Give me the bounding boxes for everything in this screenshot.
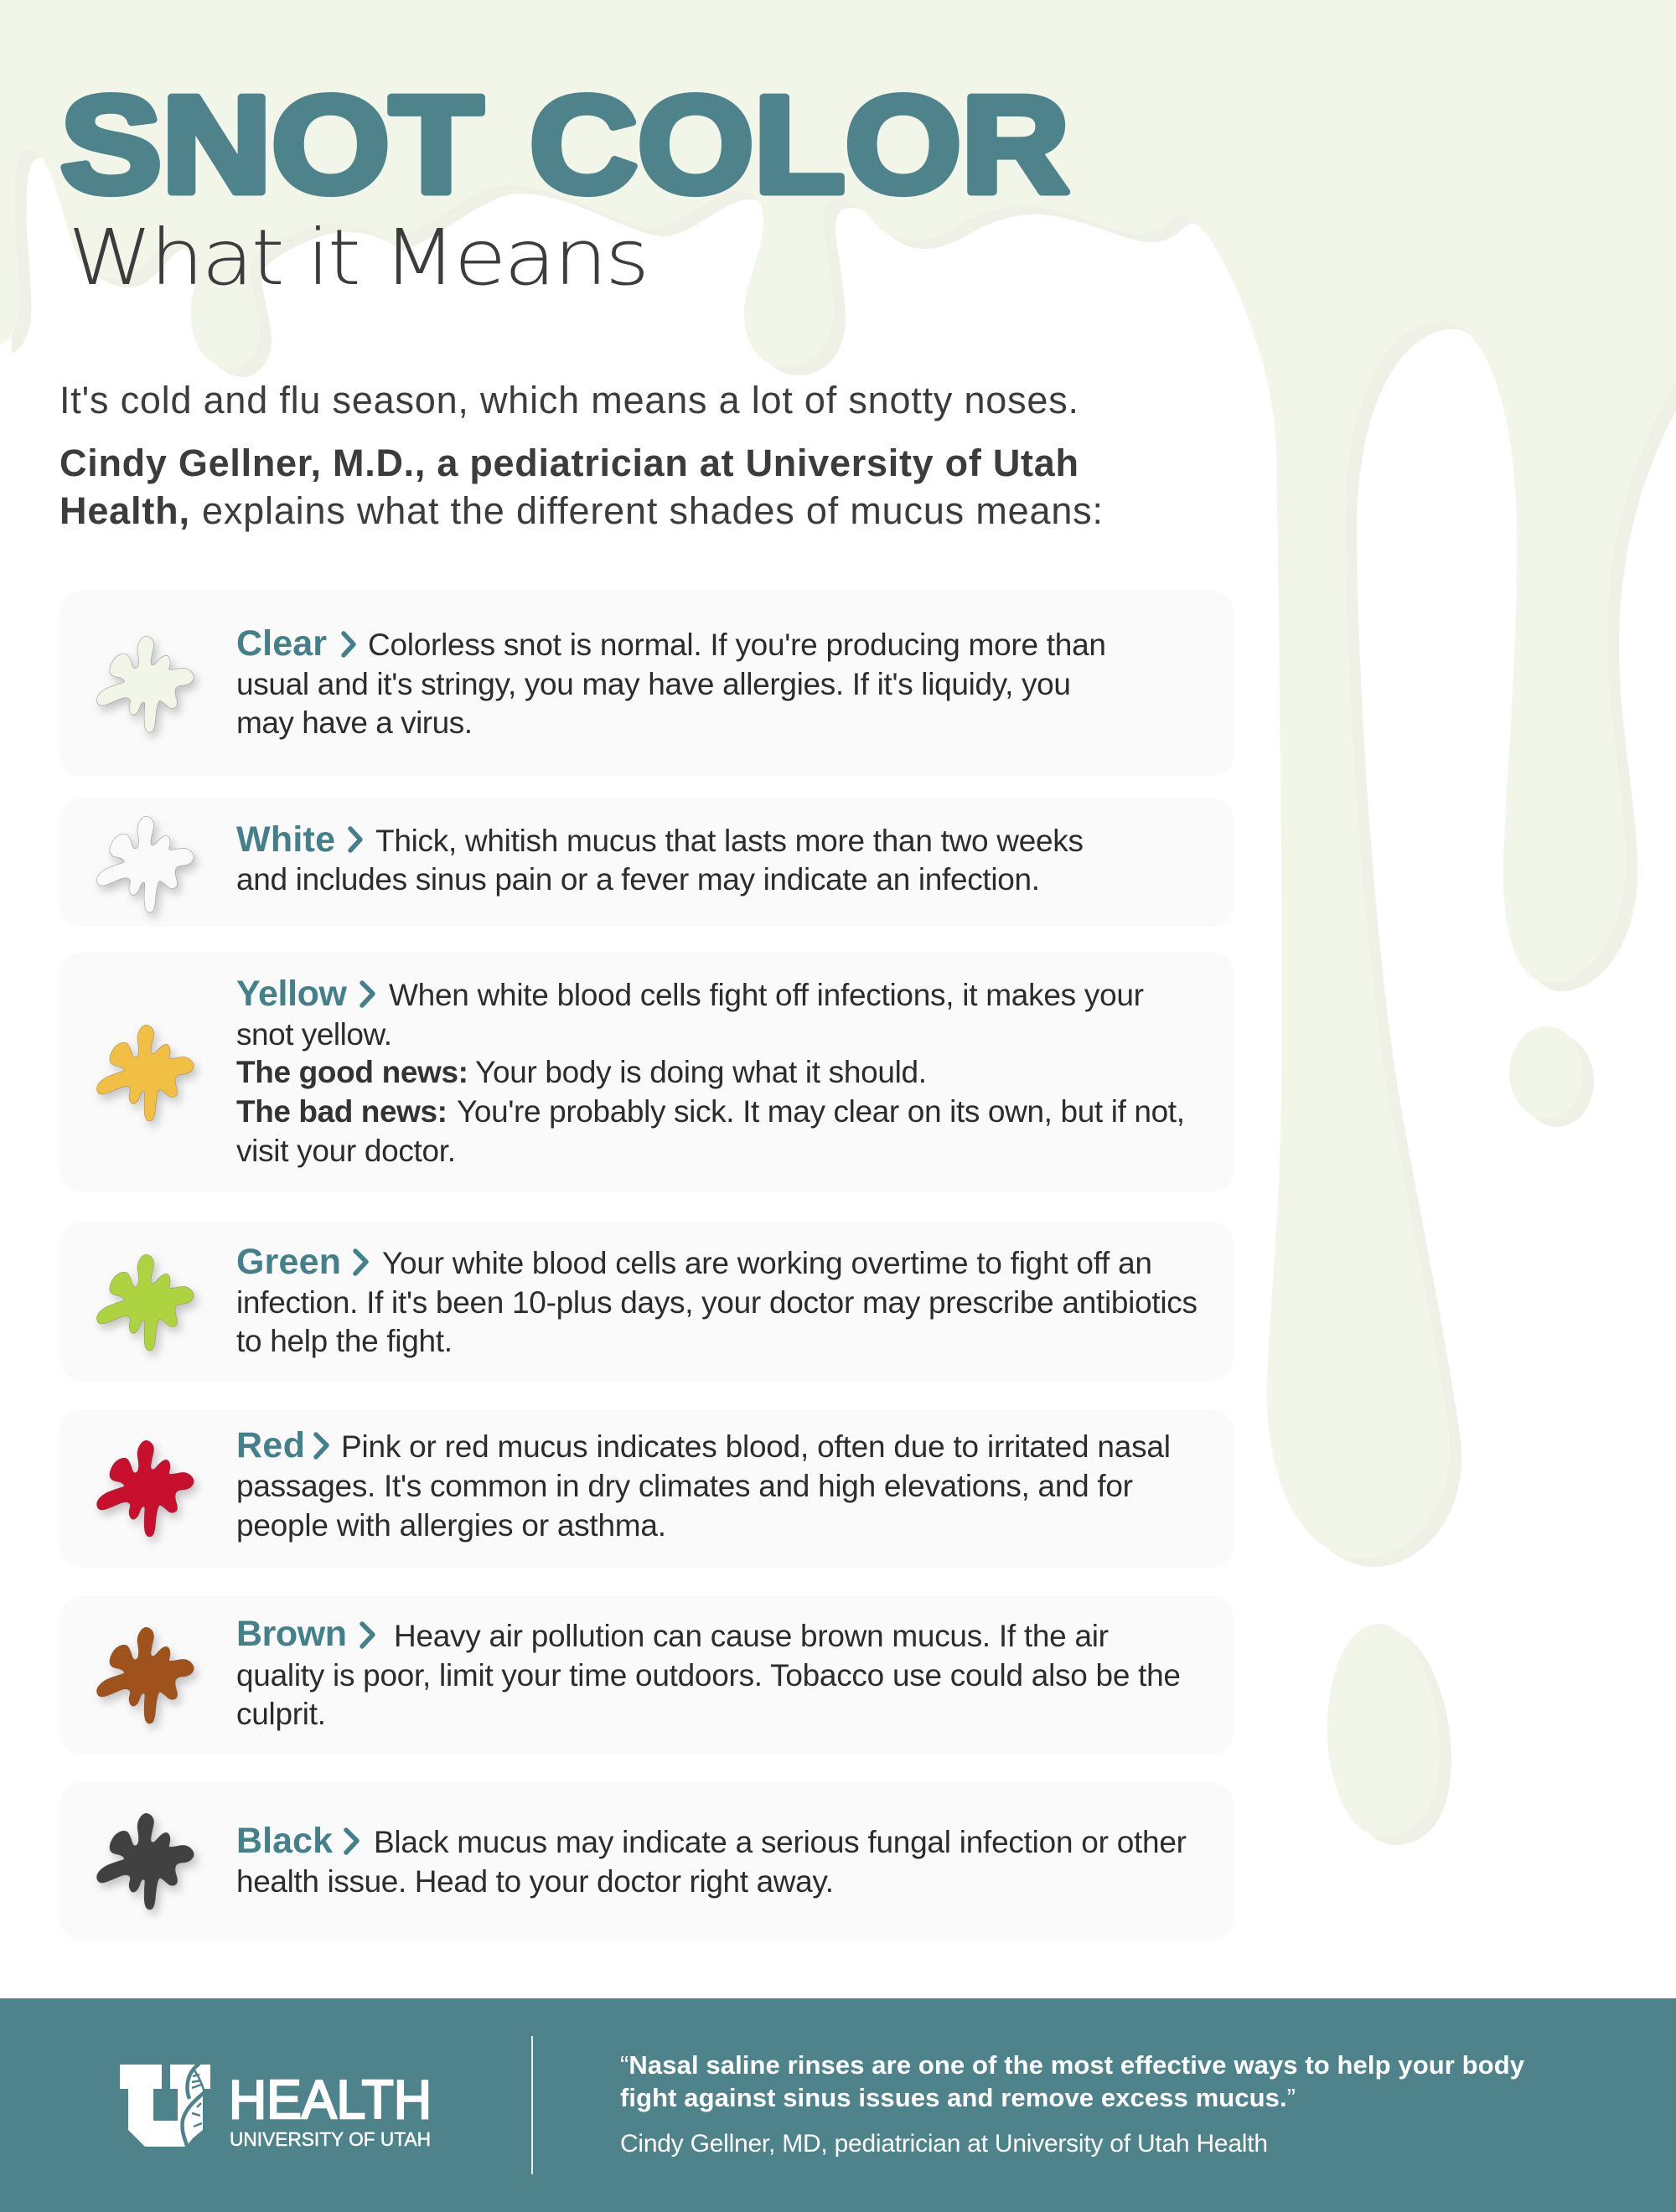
icon: red splat: [98, 1441, 193, 1536]
green text: to help the fight.: [236, 1324, 453, 1358]
footer band: [0, 1998, 1676, 2212]
red text: Pink or red mucus indicates blood, often due to irritated nasal: [341, 1429, 1171, 1464]
brown text: Heavy air pollution can cause brown mucus. If the air: [394, 1619, 1109, 1653]
yellow text: [236, 978, 1185, 1168]
red text: passages. It's common in dry climates and high elevations, and for: [236, 1469, 1133, 1503]
panel: green: [59, 1222, 1234, 1381]
black heading: Black: [236, 1821, 333, 1861]
title: [60, 68, 1069, 221]
yellow text: visit your doctor.: [236, 1134, 456, 1168]
clear text: may have a virus.: [236, 705, 473, 740]
arrow: [362, 1624, 373, 1646]
arrow: [344, 633, 354, 655]
brown text: quality is poor, limit your time outdoors. Tobacco use could also be the: [236, 1658, 1181, 1693]
clear text: usual and it's stringy, you may have allergies. If it's liquidy, you: [236, 667, 1071, 701]
intro text: [59, 379, 1103, 532]
panel: clear: [59, 591, 1234, 777]
green text: Your white blood cells are working overtime to fight off an: [382, 1246, 1152, 1280]
logo subline: UNIVERSITY OF UTAH: [230, 2128, 431, 2150]
arrow: [350, 829, 360, 850]
red heading: Red: [236, 1425, 305, 1465]
clear text: Colorless snot is normal. If you're producing more than: [368, 628, 1106, 662]
black text: Black mucus may indicate a serious fungal infection or other: [374, 1825, 1187, 1859]
yellow text: The bad news:: [236, 1094, 447, 1129]
quote: fight against sinus issues and remove excess mucus.”: [620, 2083, 1296, 2112]
intro text: Health,: [59, 489, 189, 532]
quote: “Nasal saline rinses are one of the most effective ways to help your body: [620, 2050, 1525, 2080]
brown heading: Brown: [236, 1614, 347, 1654]
logo: University of Utah Health: [120, 2064, 432, 2150]
yellow text: snot yellow.: [236, 1017, 392, 1052]
white heading: White: [236, 819, 335, 860]
logo wordmark: HEALTH: [229, 2069, 432, 2130]
icon: clear splat: [98, 637, 193, 731]
yellow heading: Yellow: [236, 974, 348, 1014]
white text: [236, 824, 1084, 897]
black text: health issue. Head to your doctor right away.: [236, 1864, 834, 1899]
quote: [620, 2050, 1525, 2158]
green text: infection. If it's been 10-plus days, your doctor may prescribe antibiotics: [236, 1285, 1198, 1320]
icon: yellow splat: [98, 1026, 193, 1120]
yellow text: Your body is doing what it should.: [475, 1055, 927, 1089]
yellow text: The good news:: [236, 1055, 468, 1089]
red text: [236, 1429, 1171, 1543]
arrow: [316, 1434, 327, 1457]
yellow text: You're probably sick. It may clear on its own, but if not,: [457, 1094, 1185, 1129]
brown text: [236, 1619, 1181, 1731]
arrow: [346, 1830, 357, 1853]
panel: red: [59, 1409, 1234, 1568]
panel: black: [59, 1782, 1234, 1941]
green heading: Green: [236, 1242, 341, 1282]
brown text: culprit.: [236, 1697, 326, 1731]
white text: Thick, whitish mucus that lasts more than two weeks: [375, 824, 1084, 858]
yellow text: When white blood cells fight off infections, it makes your: [389, 978, 1144, 1012]
title: SNOT: [60, 68, 483, 221]
quote attribution: Cindy Gellner, MD, pediatrician at University of Utah Health: [620, 2130, 1268, 2158]
clear text: [236, 628, 1106, 740]
icon: white splat: [98, 817, 193, 912]
arrow: [355, 1251, 366, 1274]
red text: people with allergies or asthma.: [236, 1508, 666, 1543]
white text: and includes sinus pain or a fever may indicate an infection.: [236, 862, 1040, 897]
intro text: Cindy Gellner, M.D., a pediatrician at University of Utah: [59, 442, 1079, 484]
panel: brown: [59, 1596, 1234, 1755]
arrow: [362, 983, 373, 1005]
icon: brown splat: [98, 1628, 193, 1723]
black text: [236, 1825, 1187, 1899]
icon: green splat: [98, 1255, 193, 1350]
intro text: It's cold and flu season, which means a lot of snotty noses.: [59, 379, 1079, 421]
subtitle: What it Means: [68, 213, 647, 302]
icon: U with DNA strand: [120, 2064, 210, 2148]
intro text: explains what the different shades of mucus means:: [202, 489, 1103, 532]
panel: white: [59, 798, 1234, 927]
icon: black splat: [98, 1814, 193, 1909]
clear heading: Clear: [236, 623, 327, 664]
title: COLOR: [530, 68, 1069, 221]
panel: yellow: [59, 952, 1234, 1192]
green text: [236, 1246, 1198, 1358]
